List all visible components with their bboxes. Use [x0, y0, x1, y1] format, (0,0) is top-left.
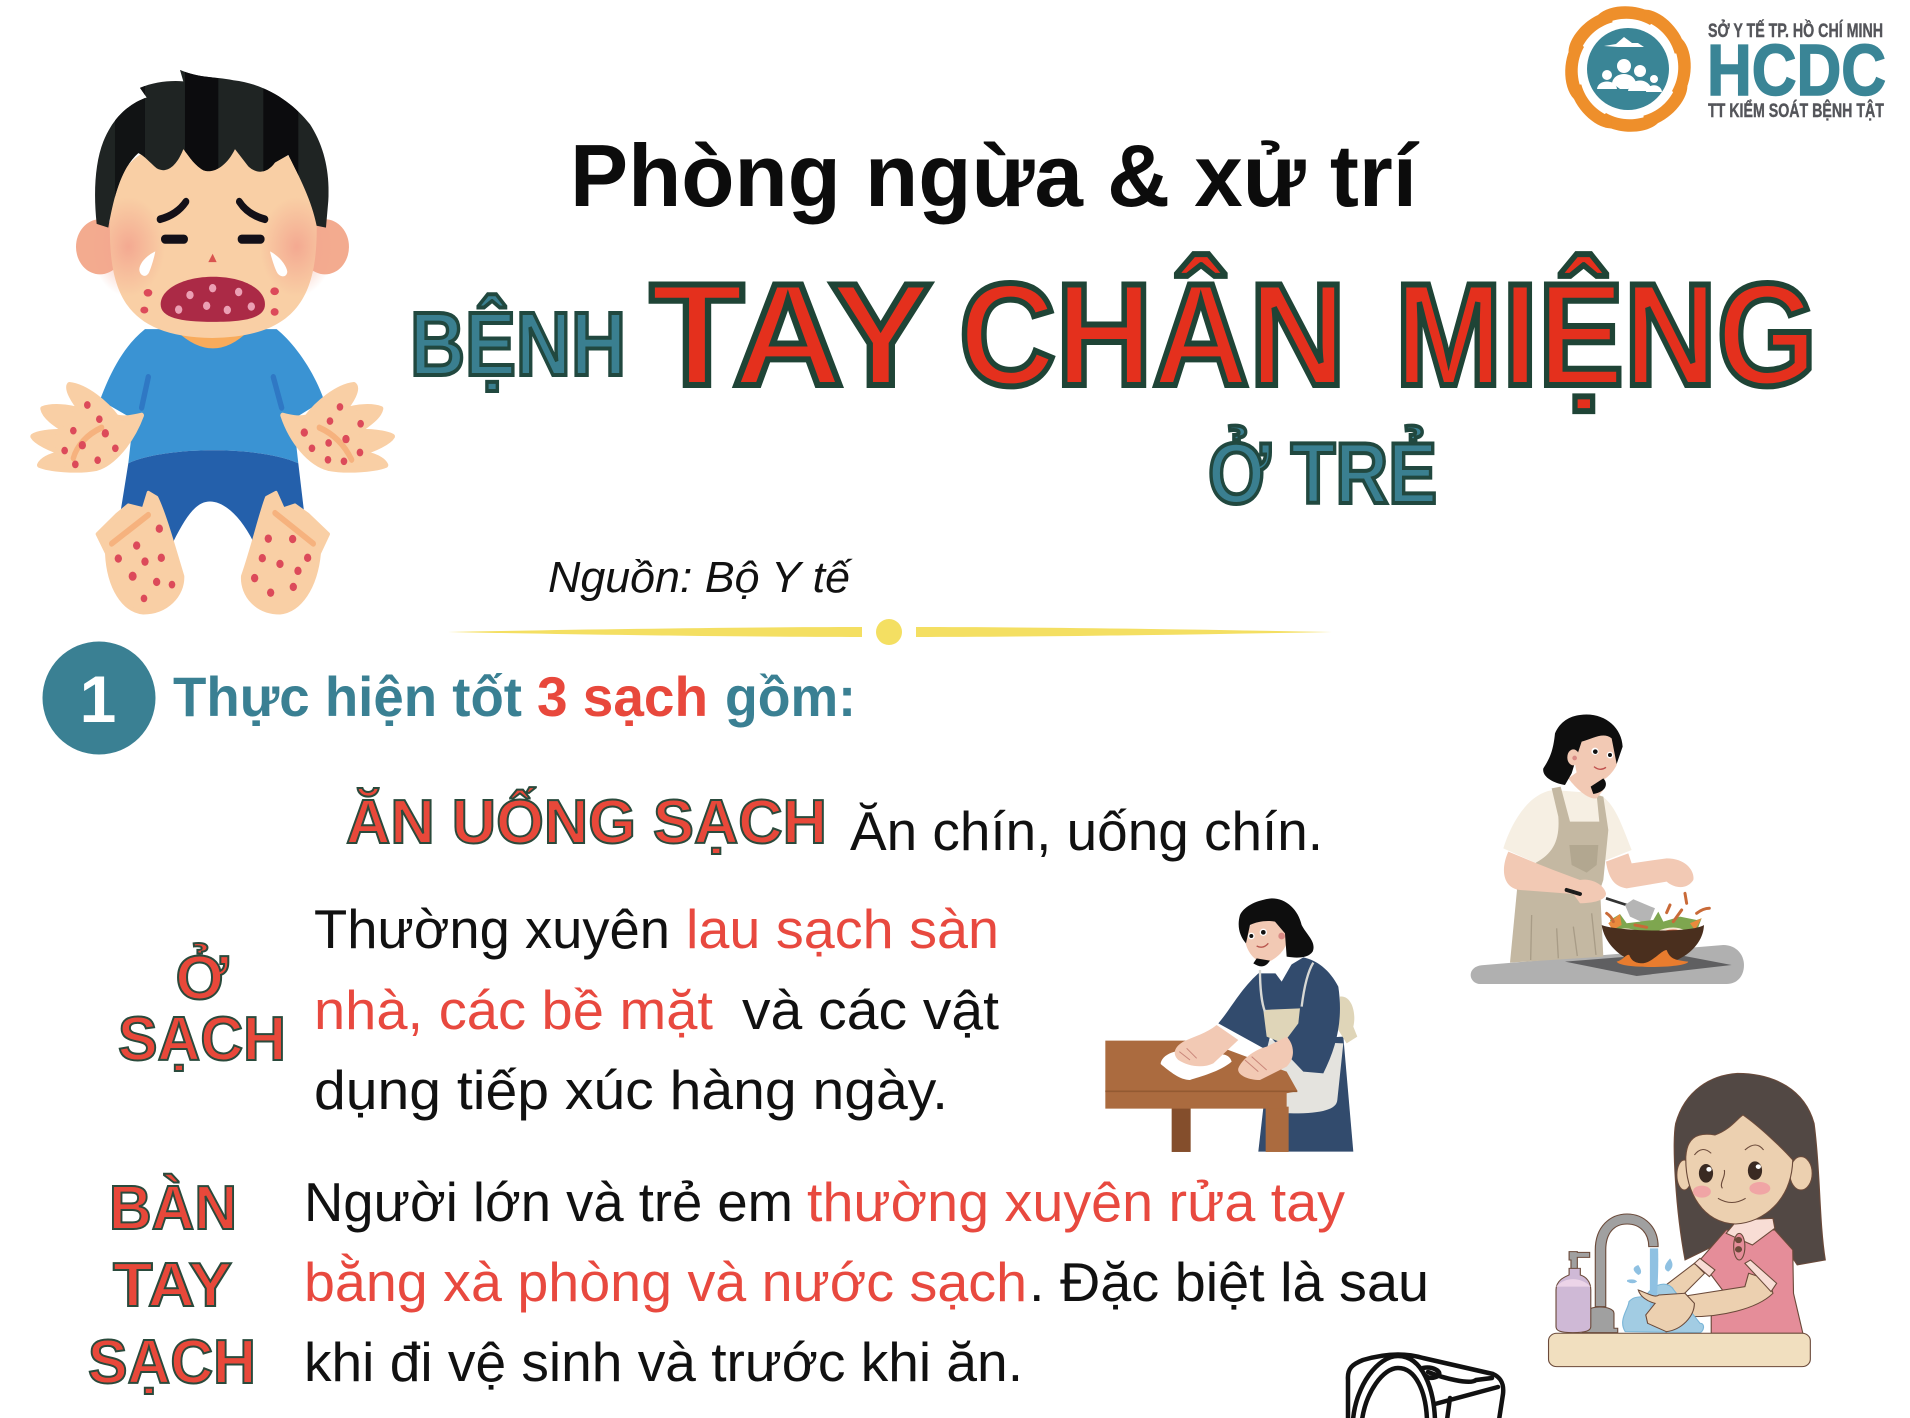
icon: woman wiping table — [1105, 898, 1357, 1152]
icon: sick boy with rash — [33, 67, 393, 613]
label: bàn tay sạch: SẠCH — [88, 1328, 256, 1397]
text: ở sạch description: nhà, các bề mặt — [314, 979, 713, 1041]
boy arms and shirt — [100, 329, 324, 463]
label: ở sạch: SẠCH — [118, 1005, 286, 1074]
text: ở sạch description: Thường xuyên — [314, 898, 670, 960]
text: bàn tay sạch description: thường xuyên rửa tay — [807, 1171, 1345, 1233]
text: ở sạch description: lau sạch sàn — [686, 898, 999, 960]
boy head — [76, 67, 349, 338]
text: ăn chín: Ăn chín, uống chín. — [850, 800, 1323, 862]
logo: HCDC — [1562, 3, 1886, 135]
number badge 1: 1 — [80, 662, 116, 736]
section heading: 3 sạch — [537, 665, 708, 728]
text: bàn tay sạch description: bằng xà phòng và nước sạch — [304, 1251, 1027, 1313]
icon: toilet line art — [1348, 1354, 1503, 1418]
section heading: gồm: — [725, 665, 856, 728]
item: ăn uống sạch — [346, 788, 1323, 862]
text: bàn tay sạch description — [304, 1171, 1429, 1393]
title: TAY CHÂN MIỆNG: CHÂN — [959, 253, 1346, 416]
icon: girl washing hands — [1549, 1073, 1825, 1367]
boy right foot — [243, 493, 328, 613]
section heading: Thực hiện tốt — [173, 665, 522, 728]
source note: Nguồn: Bộ Y tế — [548, 553, 853, 602]
label: ở sạch — [118, 944, 286, 1074]
label: ở sạch: Ở — [176, 944, 229, 1013]
boy shorts — [121, 450, 304, 542]
boy right hand — [283, 385, 393, 470]
text: ở sạch description: dụng tiếp xúc hàng ngày. — [314, 1059, 948, 1121]
item: bàn tay sạch — [88, 1171, 1429, 1397]
divider with dot — [448, 619, 1332, 645]
boy left foot — [97, 493, 183, 613]
text: bàn tay sạch description: . Đặc biệt là sau — [1029, 1251, 1429, 1313]
number badge 1 — [42, 642, 156, 754]
text: bàn tay sạch description: Người lớn và trẻ em — [304, 1171, 793, 1233]
title: Phòng ngừa & xử trí: Phòng ngừa & xử trí — [570, 126, 1420, 225]
title: BỆNH: BỆNH — [410, 293, 626, 395]
label: bàn tay sạch — [88, 1174, 256, 1397]
label: bàn tay sạch: BÀN — [109, 1174, 237, 1243]
boy left hand — [33, 385, 142, 470]
title: TAY CHÂN MIỆNG — [650, 253, 1817, 416]
logo text: HCDC: HCDC — [1707, 31, 1886, 111]
title: TAY CHÂN MIỆNG: MIỆNG — [1395, 253, 1817, 416]
logo emblem — [1562, 3, 1694, 135]
label: bàn tay sạch: TAY — [113, 1251, 232, 1320]
text: ở sạch description — [314, 898, 999, 1121]
item: ở sạch — [118, 898, 999, 1121]
section heading — [173, 665, 856, 728]
icon: woman cooking — [1471, 715, 1744, 984]
title: TAY CHÂN MIỆNG: TAY — [650, 253, 932, 416]
label: ăn uống sạch: ĂN UỐNG SẠCH — [346, 788, 827, 857]
text: bàn tay sạch description: khi đi vệ sinh và trước khi ăn. — [304, 1331, 1023, 1393]
text: ở sạch description: và các vật — [742, 979, 999, 1041]
title: Ở TRẺ: Ở TRẺ — [1208, 426, 1437, 522]
